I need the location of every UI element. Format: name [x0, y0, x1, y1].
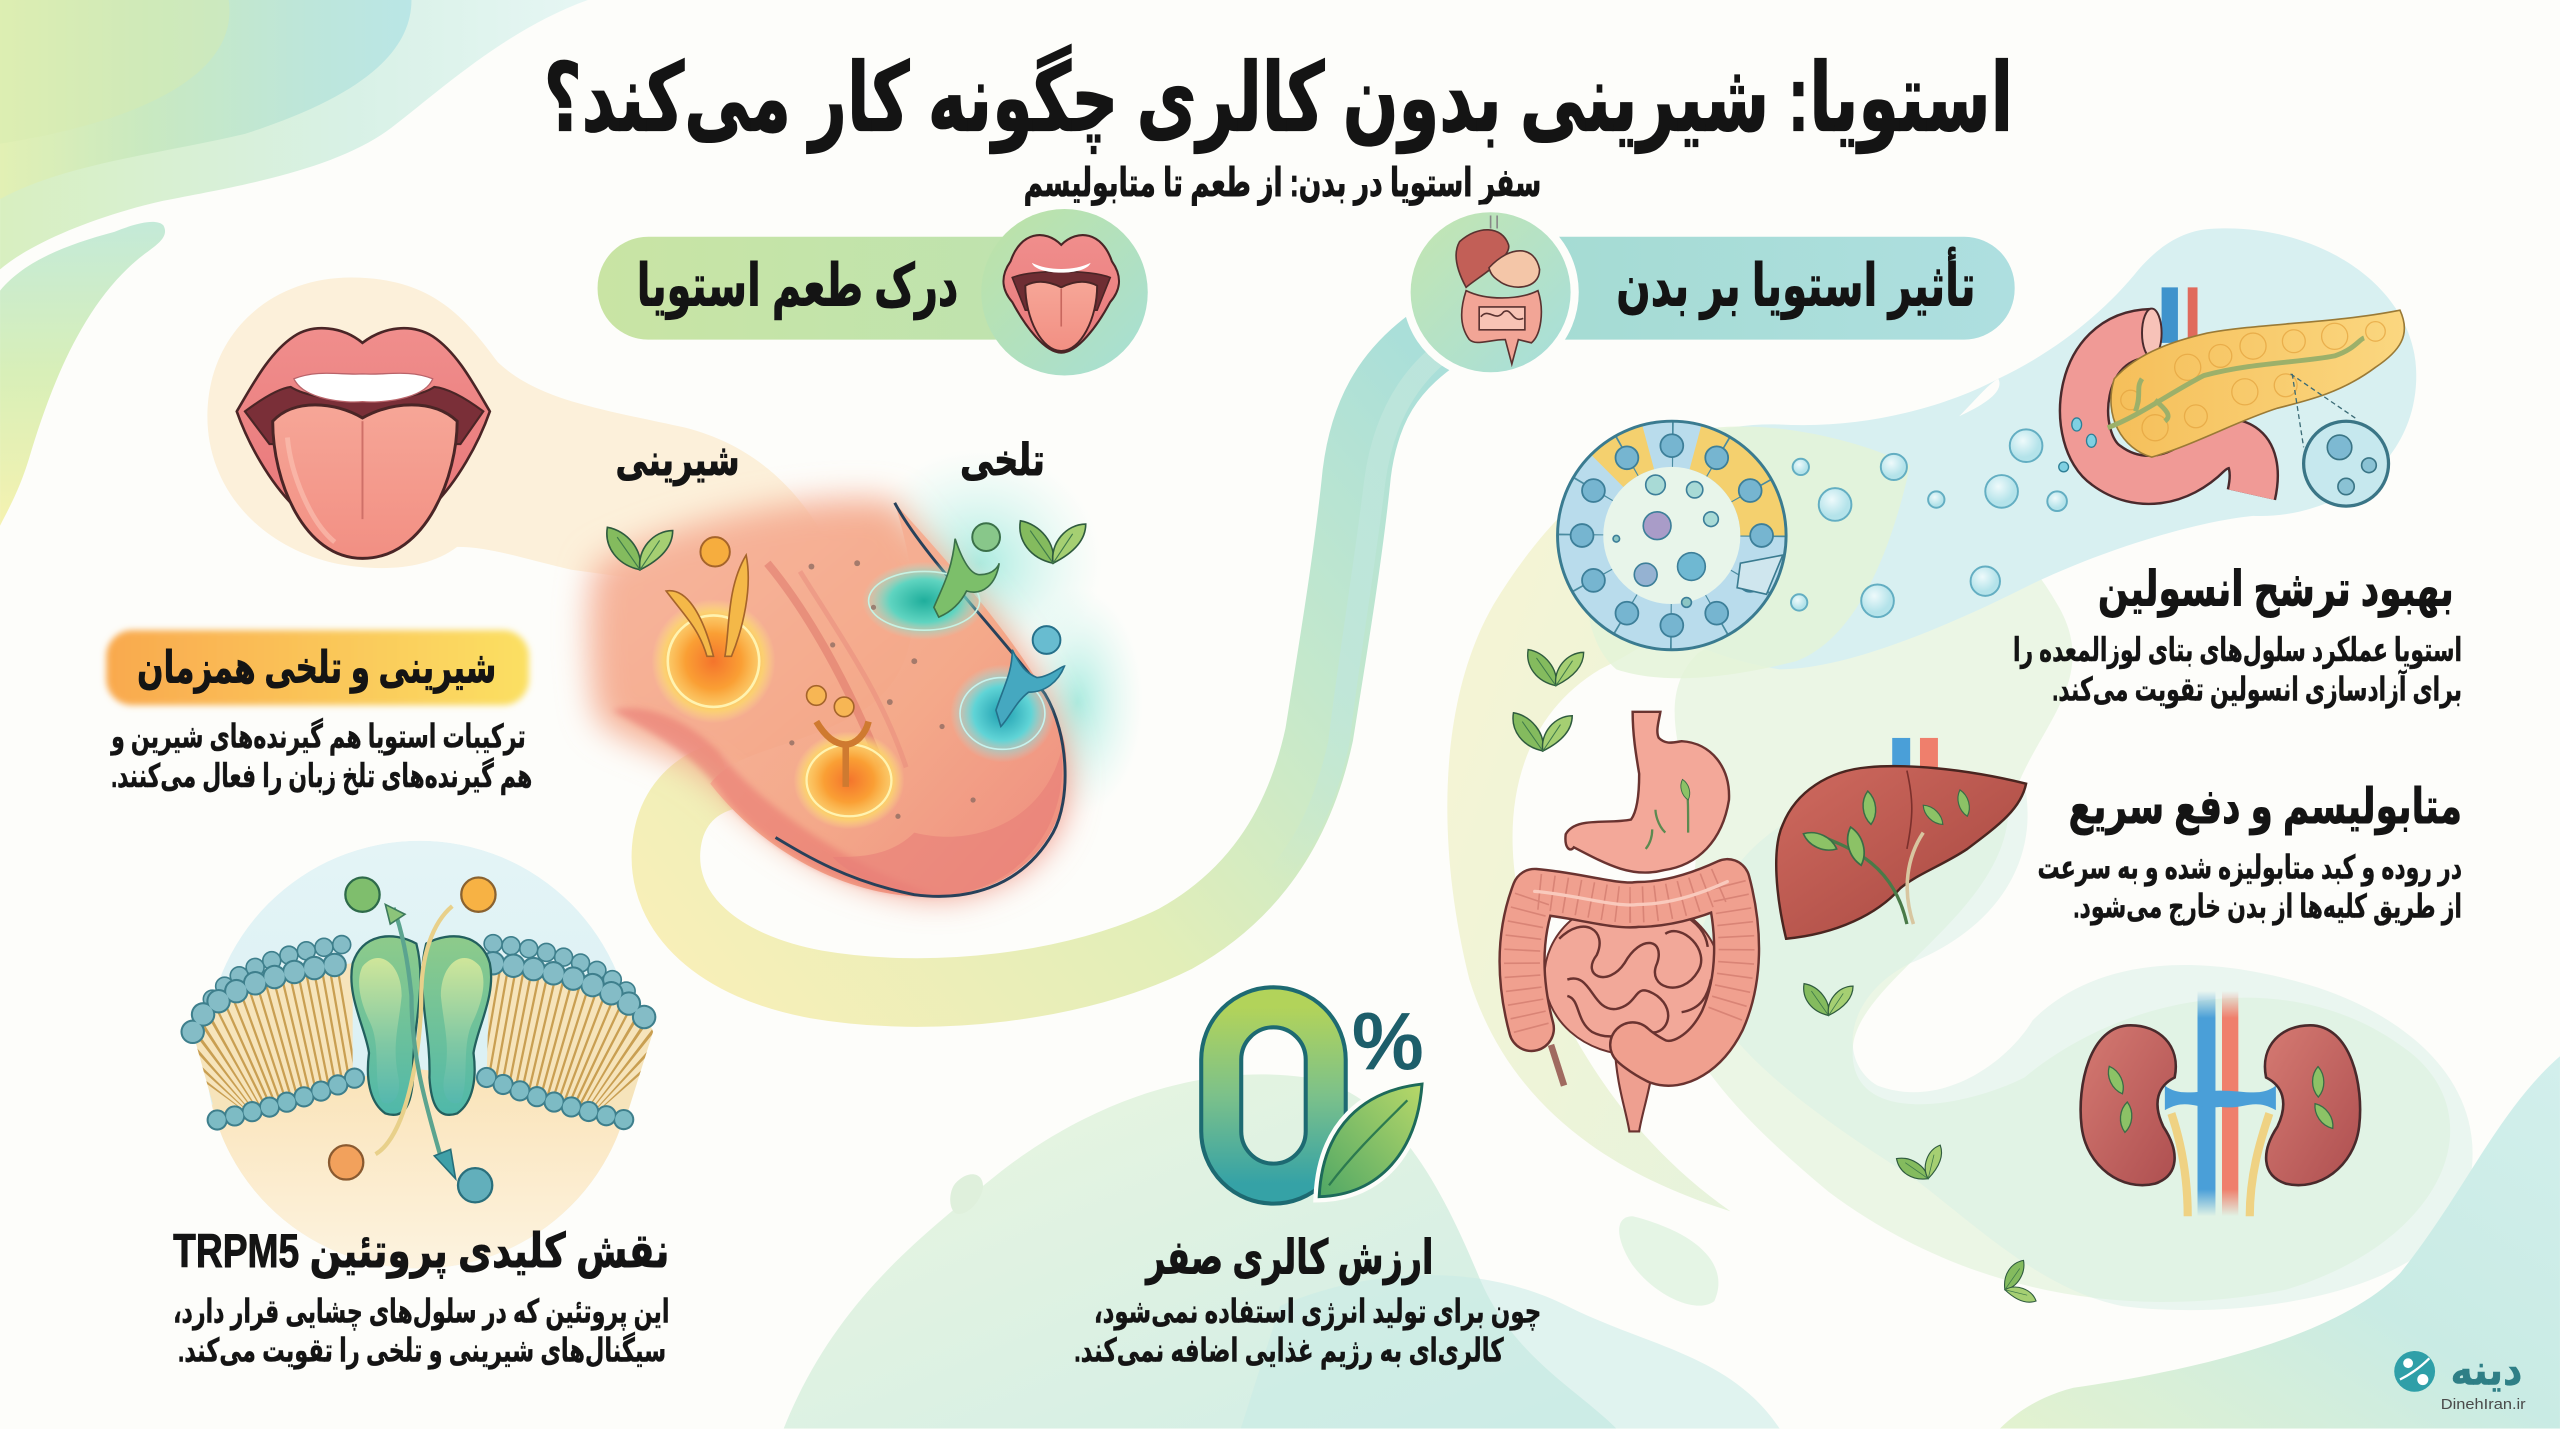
panel: zero percent icon: [1221, 996, 1424, 1197]
outline: [776, 503, 1065, 896]
rectum: [1615, 1045, 1655, 1131]
small intestine base: [1544, 898, 1721, 1055]
panel: TRPM5 membrane channel: [180, 841, 656, 1268]
text: taste description: ترکیبات استویا هم گیرنده‌های شیرین و: [110, 718, 526, 757]
flowing connector band: [666, 335, 1443, 993]
panel: kidneys: [2081, 991, 2360, 1216]
panel: stomach and intestines: [1522, 712, 2026, 1131]
arrows: [376, 904, 456, 1179]
colon: [1522, 882, 1737, 1063]
zoom callout: [2291, 374, 2389, 506]
text: zero calorie: کالری‌ای به رژیم غذایی اضافه نمی‌کند.: [1074, 1332, 1504, 1370]
text: taste description: هم گیرنده‌های تلخ زبان را فعال می‌کنند.: [111, 757, 532, 795]
icon: digestive organs: [1456, 216, 1541, 364]
label: تأثیر استویا بر بدن: [1616, 246, 1975, 320]
text: TRPM5 role: [173, 1225, 669, 1371]
ion: orange bottom: [329, 1145, 363, 1180]
panel: taste receptors close-up: [589, 449, 1143, 897]
droplets: [2059, 418, 2096, 472]
logo: دینه: [2451, 1346, 2522, 1393]
logo: DinehIran.ir: [2441, 1397, 2526, 1413]
appendix: [1551, 1045, 1564, 1086]
text: zero calorie: چون برای تولید انرژی استفاده نمی‌شود،: [1094, 1292, 1541, 1330]
icon: leaves right: [1020, 521, 1086, 563]
callout: sweet and bitter together: [106, 630, 529, 705]
text: TRPM5 role: این پروتئین که در سلول‌های چشایی قرار دارد،: [173, 1292, 669, 1331]
small intestine loops: [1559, 906, 1711, 1036]
section header: taste perception: [598, 209, 1148, 375]
text: TRPM5 role: نقش کلیدی پروتئین TRPM5: [173, 1225, 669, 1279]
icon: open mouth with tongue: [237, 328, 490, 558]
beta cell islet: [1558, 421, 1786, 650]
receptor: sweet lower: [793, 686, 905, 829]
kidney leaves: [2107, 1064, 2125, 1096]
text: zero calorie: [1074, 1231, 1541, 1370]
text: zero calorie: ارزش کالری صفر: [1145, 1231, 1433, 1285]
text: metabolism: [2038, 780, 2462, 926]
particles: [789, 560, 976, 819]
liver: [1776, 738, 2026, 939]
icon: small mouth: [1003, 235, 1119, 353]
icon: leaf: [1319, 1084, 1422, 1197]
icon: leaves floating lower: [1513, 713, 1572, 751]
text: TRPM5 role: سیگنال‌های شیرینی و تلخی را تقویت می‌کند.: [178, 1332, 666, 1371]
receptor: sweet: [651, 537, 776, 723]
left kidney: [2081, 1025, 2176, 1185]
text: taste description: [110, 718, 532, 795]
receptor: bitter green: [862, 523, 1000, 640]
lipid bilayer: [193, 944, 653, 1120]
insulin bubbles: [1791, 429, 2067, 617]
panel: zero percent icon: %: [1352, 996, 1424, 1087]
right kidney: [2265, 1025, 2360, 1185]
leaves in stomach: [1681, 779, 1690, 800]
pancreatic duct: [2108, 338, 2364, 428]
icon: floating leaves: [1804, 984, 2038, 1310]
label: sweet: شیرینی: [616, 436, 740, 486]
vessels: [2165, 287, 2175, 343]
logo: [2394, 1346, 2526, 1413]
pancreas body: [2111, 310, 2404, 457]
stomach sprouts: [1646, 787, 1688, 849]
section header: effect on body: [1402, 204, 2015, 380]
ions: [345, 878, 380, 912]
duodenum: [2084, 333, 2254, 495]
panel: pancreas on blue blob: [1558, 228, 2416, 678]
channel protein: [351, 936, 491, 1115]
icon: leaves: [607, 527, 673, 570]
callout: sweet and bitter together: شیرینی و تلخی همزمان: [137, 643, 496, 693]
label: bitter: تلخی: [960, 436, 1045, 485]
ion: orange top: [461, 878, 496, 912]
icon: leaves floating: [1528, 650, 1584, 686]
ion: teal bottom: [458, 1168, 492, 1202]
receptor: bitter blue: [950, 626, 1064, 762]
text: improved insulin secretion: [2013, 563, 2462, 708]
stomach: [1565, 712, 1729, 873]
ureters: [2171, 1113, 2269, 1216]
subtitle: سفر استویا در بدن: از طعم تا متابولیسم: [1024, 162, 1541, 206]
panel: big mouth on peach blob: [207, 278, 849, 594]
label: درک طعم استویا: [637, 253, 958, 320]
